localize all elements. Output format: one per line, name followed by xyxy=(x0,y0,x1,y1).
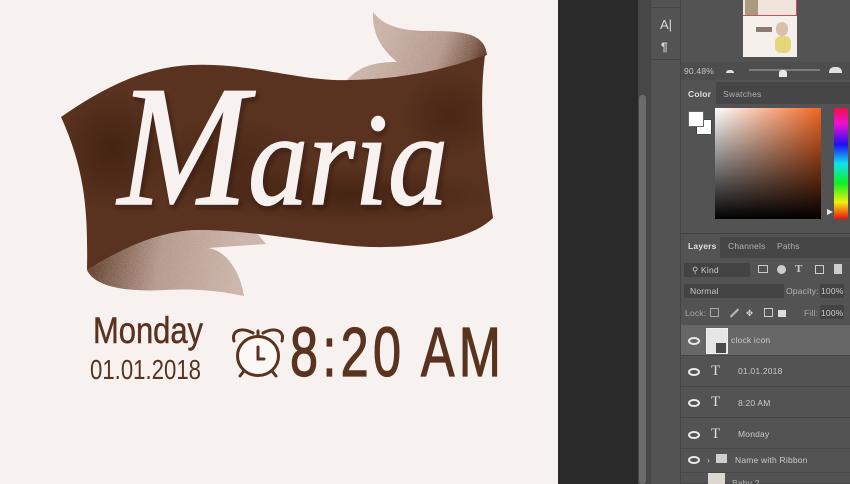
navigator thumbnail xyxy=(743,0,797,57)
ribbon fold: top right xyxy=(347,12,487,80)
blend mode xyxy=(684,284,784,298)
layers tabs xyxy=(681,237,850,258)
layer: Baby 2 xyxy=(681,473,850,484)
eye icon xyxy=(688,431,700,439)
eye icon xyxy=(688,337,700,345)
layers panel: ✥ xyxy=(746,308,753,318)
panel separators xyxy=(681,233,850,234)
layers panel: Normal xyxy=(690,286,719,296)
eye icon xyxy=(688,368,700,376)
layer: day xyxy=(681,418,850,449)
layers panel: T xyxy=(795,263,803,275)
zoom slider xyxy=(749,69,820,71)
layer group: Name with Ribbon: Name with Ribbon xyxy=(735,455,808,465)
color picker gradient xyxy=(715,108,821,219)
navigator panel xyxy=(681,0,850,80)
layer: time xyxy=(681,387,850,418)
main ribbon banner xyxy=(57,55,500,270)
eye icon xyxy=(688,456,700,464)
navigator panel: 90.48% xyxy=(684,66,714,76)
ribbon fold: bottom left xyxy=(87,230,266,296)
icon: paragraph panel: ¶ xyxy=(661,40,668,54)
tools column xyxy=(650,0,681,484)
dark workspace strip xyxy=(558,0,638,484)
layer: clock icon: clock icon xyxy=(731,335,770,345)
layer group: Name with Ribbon: › xyxy=(707,455,710,465)
color panel tabs xyxy=(681,82,850,104)
name: Maria: Maria xyxy=(115,52,448,242)
layer: time: 8:20 AM xyxy=(738,398,771,408)
layer: date xyxy=(681,356,850,387)
layer: date: 01.01.2018 xyxy=(738,366,783,376)
layer group: Name with Ribbon xyxy=(681,449,850,473)
lock row: Lock: xyxy=(685,308,706,318)
layers panel: Fill: xyxy=(804,308,818,318)
layers panel: 100% xyxy=(821,308,844,318)
color panel: Swatches xyxy=(723,89,761,99)
color panel: Color xyxy=(688,89,711,99)
day: Monday: Monday xyxy=(93,310,203,351)
layer: time: T xyxy=(711,394,720,410)
foreground and background swatches xyxy=(696,119,712,135)
color panel xyxy=(681,80,850,233)
zoom row xyxy=(681,62,850,80)
layer: date: T xyxy=(711,363,720,379)
icon: character panel: A| xyxy=(660,17,672,32)
layers panel: Layers xyxy=(688,241,717,251)
layer: day: T xyxy=(711,426,720,442)
kind filter xyxy=(684,263,750,277)
date: 01.01.2018 xyxy=(90,354,201,385)
layer: clock icon xyxy=(681,325,850,356)
layers panel: ⚲ Kind xyxy=(692,265,719,275)
layers panel: Opacity: xyxy=(786,286,819,296)
time: 8:20 AM: 8:20 AM xyxy=(290,313,505,391)
layers panel: Channels xyxy=(728,241,766,251)
scrollbar xyxy=(638,0,650,484)
hue slider xyxy=(834,108,848,219)
canvas artwork xyxy=(0,0,558,484)
eye icon xyxy=(688,399,700,407)
layers panel: 100% xyxy=(821,286,844,296)
icon: alarm clock xyxy=(233,330,283,376)
layers panel xyxy=(681,233,850,484)
layer: day: Monday xyxy=(738,429,769,439)
layers panel: Paths xyxy=(777,241,800,251)
